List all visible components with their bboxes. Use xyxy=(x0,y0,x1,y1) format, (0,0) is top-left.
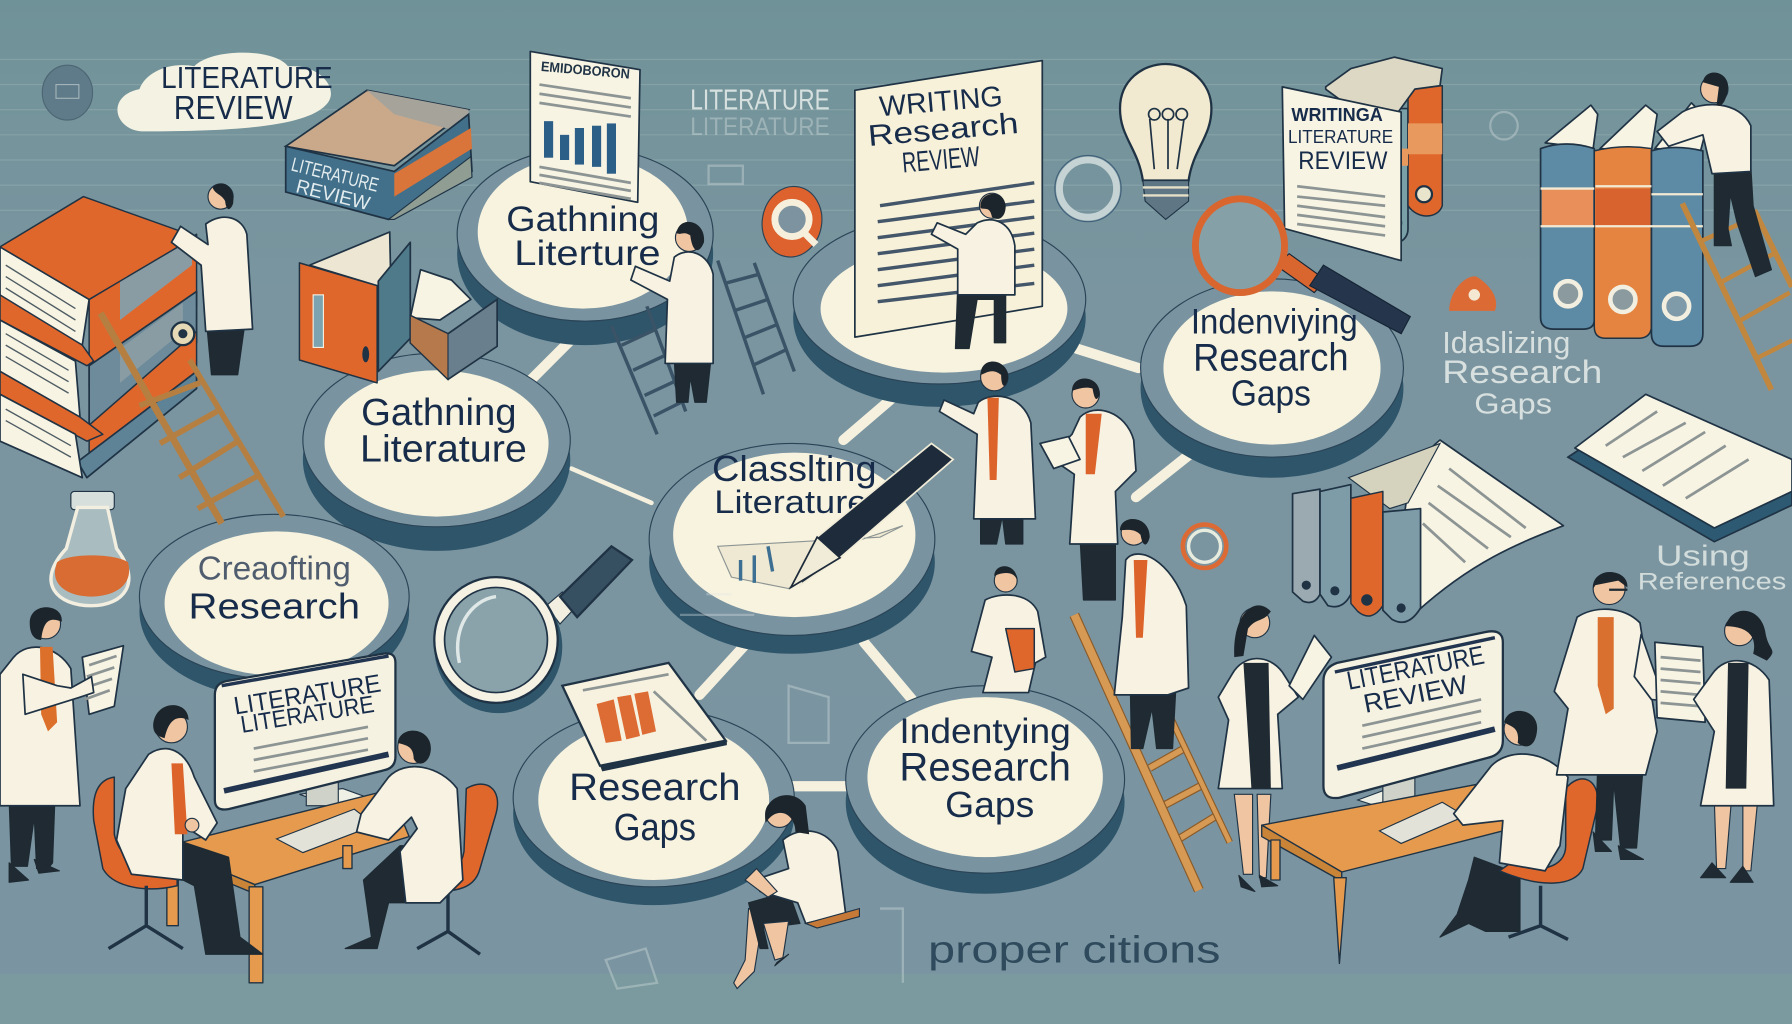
disc: gathering literature lower xyxy=(303,353,570,551)
disc: identifying research gaps upper xyxy=(1141,279,1403,478)
label: research gaps: Gaps xyxy=(614,806,696,848)
label: classifying literature xyxy=(712,448,877,520)
document: writing literature review: REVIEW xyxy=(1298,147,1388,175)
computer left: LITERATURE xyxy=(232,670,383,720)
binders: writing a literature review xyxy=(1326,57,1442,244)
label: identifying research gaps lower: Indentying xyxy=(899,711,1071,751)
icon: flask xyxy=(51,491,129,606)
disc: research gaps xyxy=(513,709,794,905)
label: identifying research gaps lower: Research xyxy=(899,746,1071,790)
document: writing research review: REVIEW xyxy=(901,141,981,180)
label: identifying research gaps upper: Indenviying xyxy=(1191,302,1358,342)
ladder gathering top xyxy=(611,261,794,434)
open book right xyxy=(1568,394,1792,542)
cloud title: literature review xyxy=(117,53,333,131)
person: seated facing screen with chair xyxy=(345,731,498,954)
person: woman facing left xyxy=(1694,611,1774,882)
disc: classifying literature xyxy=(649,443,935,654)
ghost label: literature xyxy=(690,85,830,141)
document: bar chart page: EMIDOBORON xyxy=(540,59,630,82)
label: research gaps xyxy=(569,766,741,848)
person: writer at document xyxy=(931,193,1015,349)
tall binders top right xyxy=(1541,103,1709,346)
label: gathering literature upper: Gathning xyxy=(506,199,659,239)
cloud title: literature review: LITERATURE xyxy=(161,60,333,95)
icon: ring xyxy=(1055,155,1121,222)
book stack: literature review xyxy=(286,90,472,219)
person: scientist at gathering disc xyxy=(631,222,713,402)
document: shared page xyxy=(1655,642,1705,722)
document: writing research review xyxy=(855,61,1042,337)
ghost label: identifying research gaps: Gaps xyxy=(1474,389,1552,421)
computer right: REVIEW xyxy=(1361,669,1470,719)
document: writing research review: WRITING xyxy=(878,81,1004,123)
document: bar chart page xyxy=(530,51,640,202)
document: writing literature review xyxy=(1282,87,1401,261)
cloud title: literature review: REVIEW xyxy=(174,90,293,127)
ghost label: identifying research gaps xyxy=(1442,325,1602,421)
person: man with paper left xyxy=(0,607,123,882)
label: creating research: Research xyxy=(189,585,360,626)
document: writing literature review: WRITINGA xyxy=(1291,104,1383,125)
label: creating research: Creaofting xyxy=(198,550,351,587)
disc: identifying research gaps lower xyxy=(846,686,1125,894)
ghost label: literature: LITERATURE xyxy=(690,85,830,117)
person: woman seated xyxy=(734,795,859,989)
label: creating research xyxy=(189,550,360,626)
computer right: LITERATURE xyxy=(1344,640,1487,696)
label: identifying research gaps lower: Gaps xyxy=(945,784,1034,825)
ghost label: literature: LITERATURE xyxy=(690,113,830,141)
computer left xyxy=(215,653,395,810)
label: identifying research gaps lower xyxy=(899,711,1071,825)
ghost label: identifying research gaps: Research xyxy=(1442,354,1602,390)
ring icon center right xyxy=(1183,525,1226,568)
person: seated right with chair xyxy=(1440,711,1598,939)
ladder top right xyxy=(1682,203,1792,390)
disc: creating research xyxy=(139,514,409,698)
ghost label: using references: Using xyxy=(1656,541,1750,573)
ghost icons xyxy=(606,112,1518,989)
ghost label: using references: References xyxy=(1638,569,1786,596)
document: report with orange bars xyxy=(562,663,727,771)
large book stack left xyxy=(0,197,197,478)
person: scientist with paper xyxy=(1040,378,1136,600)
ghost label: identifying research gaps: Idaslizing xyxy=(1442,325,1570,360)
ghost label: using references xyxy=(1638,541,1786,596)
desk left xyxy=(163,790,409,983)
book stack: literature review: REVIEW xyxy=(294,176,373,215)
label: gathering literature upper: Literture xyxy=(514,233,661,273)
label: gathering literature lower: Literature xyxy=(360,428,527,470)
icon: magnifier top right xyxy=(1195,199,1410,334)
document: writing literature review: LITERATURE xyxy=(1288,126,1393,147)
label: identifying research gaps upper xyxy=(1191,302,1358,414)
person: woman with paper xyxy=(1218,605,1331,891)
icon: badge top-left xyxy=(42,65,93,120)
label: gathering literature upper xyxy=(506,199,661,273)
label: research gaps: Research xyxy=(569,766,741,808)
icon: pen on classifying disc xyxy=(718,443,953,589)
icon: orange tag xyxy=(1449,276,1496,311)
person: seated left with chair xyxy=(93,705,263,954)
document: writing research review: Research xyxy=(867,107,1020,153)
person: scientist at book stack xyxy=(171,183,253,375)
icon: magnifier center xyxy=(434,546,632,713)
person: scientist on ladder xyxy=(1114,519,1189,749)
disc: writing research review xyxy=(793,215,1086,407)
person: man with glasses xyxy=(1554,572,1680,859)
icon: light bulb xyxy=(1120,64,1211,219)
book stack: literature review: LITERATURE xyxy=(289,154,381,197)
computer right xyxy=(1323,631,1503,814)
binders middle xyxy=(299,232,497,383)
caption: proper citations: proper citions xyxy=(928,928,1221,970)
label: classifying literature: Classlting xyxy=(712,448,877,489)
person: small figure with binder xyxy=(971,566,1046,693)
books and open volume center right xyxy=(1293,440,1563,622)
icon: orange magnifier badge xyxy=(757,182,827,262)
label: identifying research gaps upper: Gaps xyxy=(1231,373,1311,414)
label: gathering literature lower xyxy=(360,391,527,470)
person: scientist gesturing center xyxy=(939,362,1035,544)
label: gathering literature lower: Gathning xyxy=(361,391,517,433)
label: identifying research gaps upper: Research xyxy=(1193,336,1349,379)
person: climber top right xyxy=(1657,73,1771,277)
desk right xyxy=(1262,779,1512,963)
ladder center right xyxy=(1074,615,1230,890)
disc: gathering literature upper xyxy=(457,147,713,345)
connectors between discs xyxy=(531,338,1192,786)
ladder left xyxy=(101,313,283,523)
label: classifying literature: Literature xyxy=(714,484,867,520)
computer left: LITERATURE xyxy=(239,691,376,739)
